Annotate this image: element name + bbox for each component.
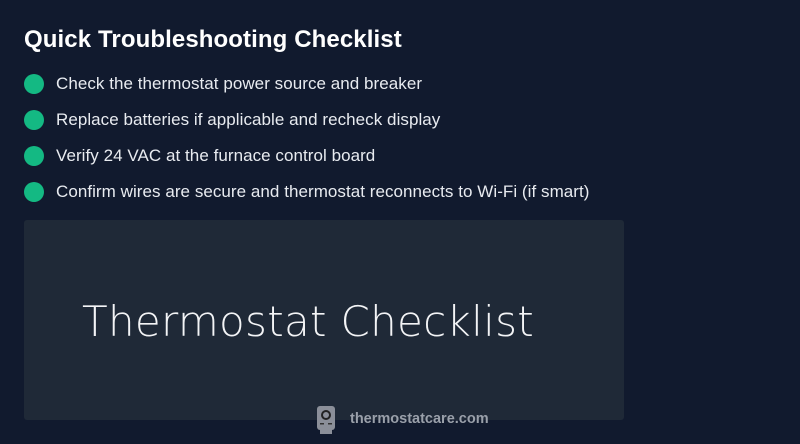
checklist item 2: Replace batteries if applicable and recheck display	[56, 110, 440, 129]
checklist item 1: Check the thermostat power source and breaker	[56, 74, 422, 93]
footer text: thermostatcare.com	[350, 411, 489, 427]
image panel	[24, 220, 624, 420]
checklist item 3: Verify 24 VAC at the furnace control board	[56, 146, 375, 165]
icon: thermostat	[317, 406, 335, 434]
panel caption: Thermostat Checklist	[82, 297, 534, 346]
footer brand	[317, 406, 489, 434]
checklist item 4: Confirm wires are secure and thermostat reconnects to Wi-Fi (if smart)	[56, 182, 589, 201]
title: Quick Troubleshooting Checklist	[24, 26, 402, 53]
